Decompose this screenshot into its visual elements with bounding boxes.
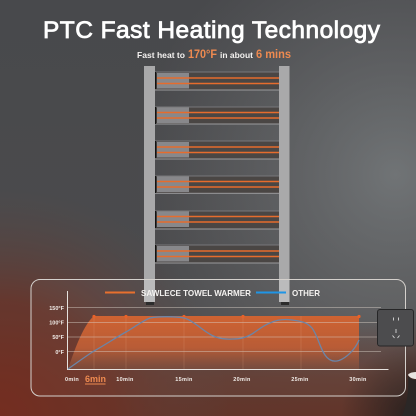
heating bar 2 <box>155 106 279 124</box>
towel rack <box>144 66 290 305</box>
legend <box>105 288 320 298</box>
axes <box>68 291 388 370</box>
legend: OTHER <box>292 288 320 298</box>
rail feet <box>146 302 289 305</box>
y axis labels <box>49 306 65 356</box>
6min highlight: 6min <box>85 374 106 385</box>
x axis labels: 10min <box>116 377 134 383</box>
x axis labels: 15min <box>175 377 193 383</box>
title: PTC Fast Heating Technology <box>43 17 381 44</box>
chart panel <box>31 280 406 396</box>
x axis labels: 20min <box>233 377 251 383</box>
rail highlights behind glass <box>144 280 290 302</box>
heating bar 6 <box>155 244 279 264</box>
icon: wall socket <box>378 310 414 346</box>
y axis labels: 150°F <box>49 306 65 312</box>
orange area: towel warmer <box>68 316 359 369</box>
subtitle: 170°F <box>188 49 217 61</box>
right rail <box>279 66 290 302</box>
decor: cup <box>402 372 416 416</box>
subtitle <box>137 49 291 61</box>
x axis labels <box>65 377 367 383</box>
heat markers <box>92 315 361 318</box>
heating bar 1 <box>155 72 279 90</box>
heating bar 5 <box>155 210 279 230</box>
other heater curve <box>68 317 359 369</box>
x axis labels: 30min <box>349 377 367 383</box>
heating bar 3 <box>155 140 279 160</box>
y axis labels: 0°F <box>55 350 65 356</box>
left rail <box>144 66 155 302</box>
x axis labels: 0min <box>65 377 79 383</box>
subtitle: in about <box>220 50 253 60</box>
x axis labels: 25min <box>291 377 309 383</box>
y axis labels: 50°F <box>52 335 65 341</box>
y axis labels: 100°F <box>49 320 65 326</box>
grid lines <box>68 308 381 352</box>
legend: SAWLECE TOWEL WARMER <box>141 288 251 298</box>
heating bar 4 <box>155 176 279 194</box>
subtitle: Fast heat to <box>137 50 185 60</box>
subtitle: 6 mins <box>256 49 291 61</box>
